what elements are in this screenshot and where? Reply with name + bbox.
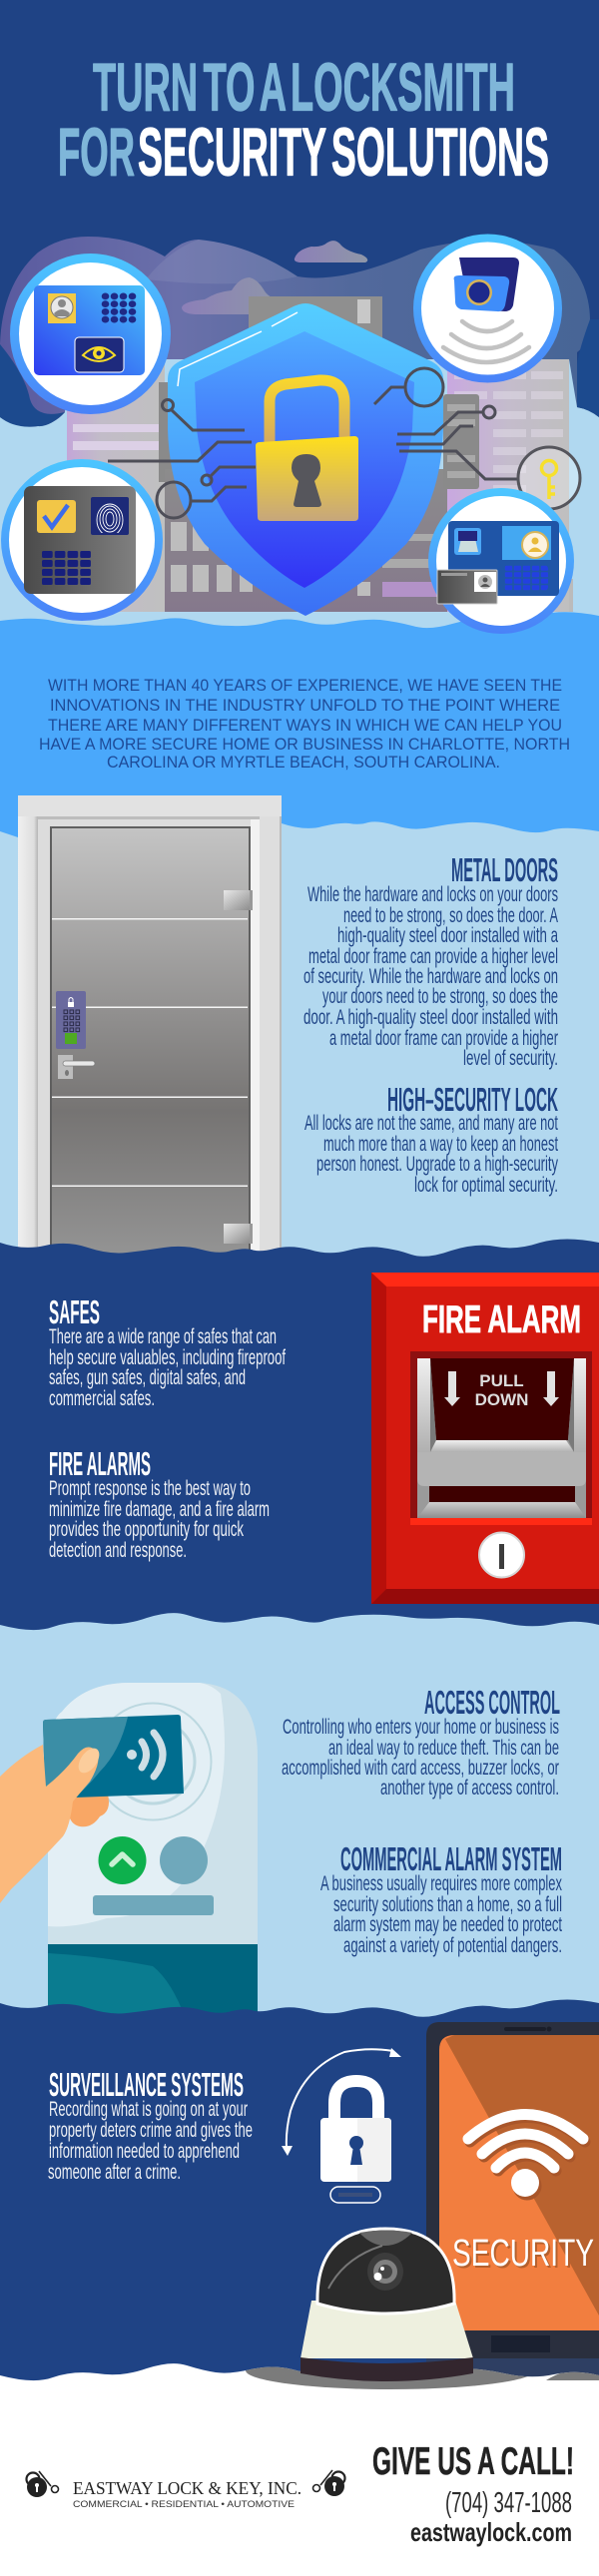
alarm pull handle: PULL	[479, 1371, 524, 1390]
intro paragraph: INNOVATIONS IN THE INDUSTRY UNFOLD TO THE POINT WHERE	[50, 696, 560, 715]
logo icon left	[26, 2471, 58, 2497]
hinges	[224, 890, 253, 1244]
hero illustration	[0, 234, 599, 858]
icon circle: id card and eye scanner	[10, 254, 171, 414]
intro paragraph: WITH MORE THAN 40 YEARS OF EXPERIENCE, WE HAVE SEEN THE	[48, 676, 562, 695]
status lights	[93, 1836, 214, 1915]
safes text: safes, gun safes, digital safes, and	[49, 1366, 246, 1389]
dome security camera	[300, 2229, 473, 2381]
alarm pull handle	[410, 1351, 592, 1525]
key magnifier circle	[518, 447, 580, 509]
dark band: surveillance	[0, 2000, 599, 2417]
fire alarms text: Prompt response is the best way to	[49, 1477, 251, 1500]
door illustration	[18, 795, 282, 1258]
rotating arrow	[282, 2048, 401, 2156]
surveillance systems text: Recording what is going on at your	[49, 2098, 248, 2121]
alarm pull handle: DOWN	[475, 1390, 528, 1409]
surveillance systems text	[48, 2066, 253, 2184]
title: FOR	[58, 115, 135, 191]
translucent hills	[0, 237, 590, 429]
door panel	[51, 827, 250, 1258]
shield	[168, 303, 443, 616]
hand fingers	[68, 1795, 109, 1826]
fire alarms text: detection and response.	[49, 1539, 187, 1562]
left dark blob	[0, 344, 65, 427]
title	[58, 50, 549, 191]
header background	[0, 0, 599, 659]
card reader illustration	[0, 1683, 258, 2019]
hand	[0, 1745, 104, 1903]
fire alarm illustration	[371, 1273, 599, 1604]
city buildings	[67, 296, 573, 612]
intro paragraph: THERE ARE MANY DIFFERENT WAYS IN WHICH WE CAN HELP YOU	[48, 716, 562, 735]
circuit lines	[108, 368, 518, 518]
intro paragraph: CAROLINA OR MYRTLE BEACH, SOUTH CAROLINA.	[107, 753, 500, 772]
surveillance systems text: information needed to apprehend	[49, 2140, 240, 2163]
surveillance systems text: someone after a crime.	[48, 2161, 181, 2184]
safes text: commercial safes.	[49, 1387, 155, 1410]
icon circle: fingerprint and keypad	[1, 459, 163, 621]
safes text	[49, 1293, 286, 1410]
safes text: There are a wide range of safes that can	[49, 1325, 277, 1348]
right dark blob	[577, 319, 599, 417]
hero wave	[0, 612, 599, 858]
light sky band	[0, 359, 599, 639]
logo icon right	[313, 2470, 345, 2496]
door keypad	[56, 991, 86, 1049]
alarm lock button	[479, 1533, 524, 1577]
clouds	[182, 241, 367, 314]
reader body	[48, 1683, 258, 1944]
padlock	[256, 380, 358, 521]
high-security lock text	[304, 1081, 558, 1197]
call to action	[372, 2440, 574, 2547]
safes text: SAFES	[49, 1293, 100, 1330]
logo tagline: COMMERCIAL • RESIDENTIAL • AUTOMOTIVE	[73, 2499, 295, 2510]
access control text	[282, 1684, 560, 1800]
logo name: EASTWAY LOCK & KEY, INC.	[73, 2478, 301, 2498]
fire alarms text: FIRE ALARMS	[49, 1445, 151, 1482]
white footer background	[0, 2363, 599, 2576]
metal doors text	[303, 851, 558, 1070]
company logo	[26, 2470, 345, 2510]
intro paragraph: HAVE A MORE SECURE HOME OR BUSINESS IN CHARLOTTE, NORTH	[39, 735, 570, 754]
door handle	[58, 1055, 95, 1079]
icon circle: access panel and card	[428, 488, 574, 634]
safes text: help secure valuables, including fireproof	[49, 1346, 286, 1369]
camera shadow	[246, 2367, 599, 2389]
fire alarms text	[49, 1445, 270, 1562]
intro paragraph	[39, 676, 570, 772]
fire alarms text: minimize fire damage, and a fire alarm	[49, 1498, 270, 1521]
access card	[43, 1715, 184, 1798]
icon circle: security camera	[413, 234, 562, 383]
light blue band: access control	[0, 1613, 599, 2036]
commercial alarm system text	[320, 1840, 562, 1957]
text: SURVEILLANCE SYSTEMS	[49, 2066, 244, 2103]
wifi icon	[468, 2114, 585, 2197]
surveillance systems text: property deters crime and gives the	[49, 2119, 253, 2142]
white padlock icon	[320, 2081, 391, 2203]
smartphone	[426, 2022, 599, 2380]
dark band: safes and fire alarms	[0, 1240, 599, 1647]
light blue band	[0, 821, 599, 1297]
fire alarms text: provides the opportunity for quick	[49, 1518, 244, 1541]
